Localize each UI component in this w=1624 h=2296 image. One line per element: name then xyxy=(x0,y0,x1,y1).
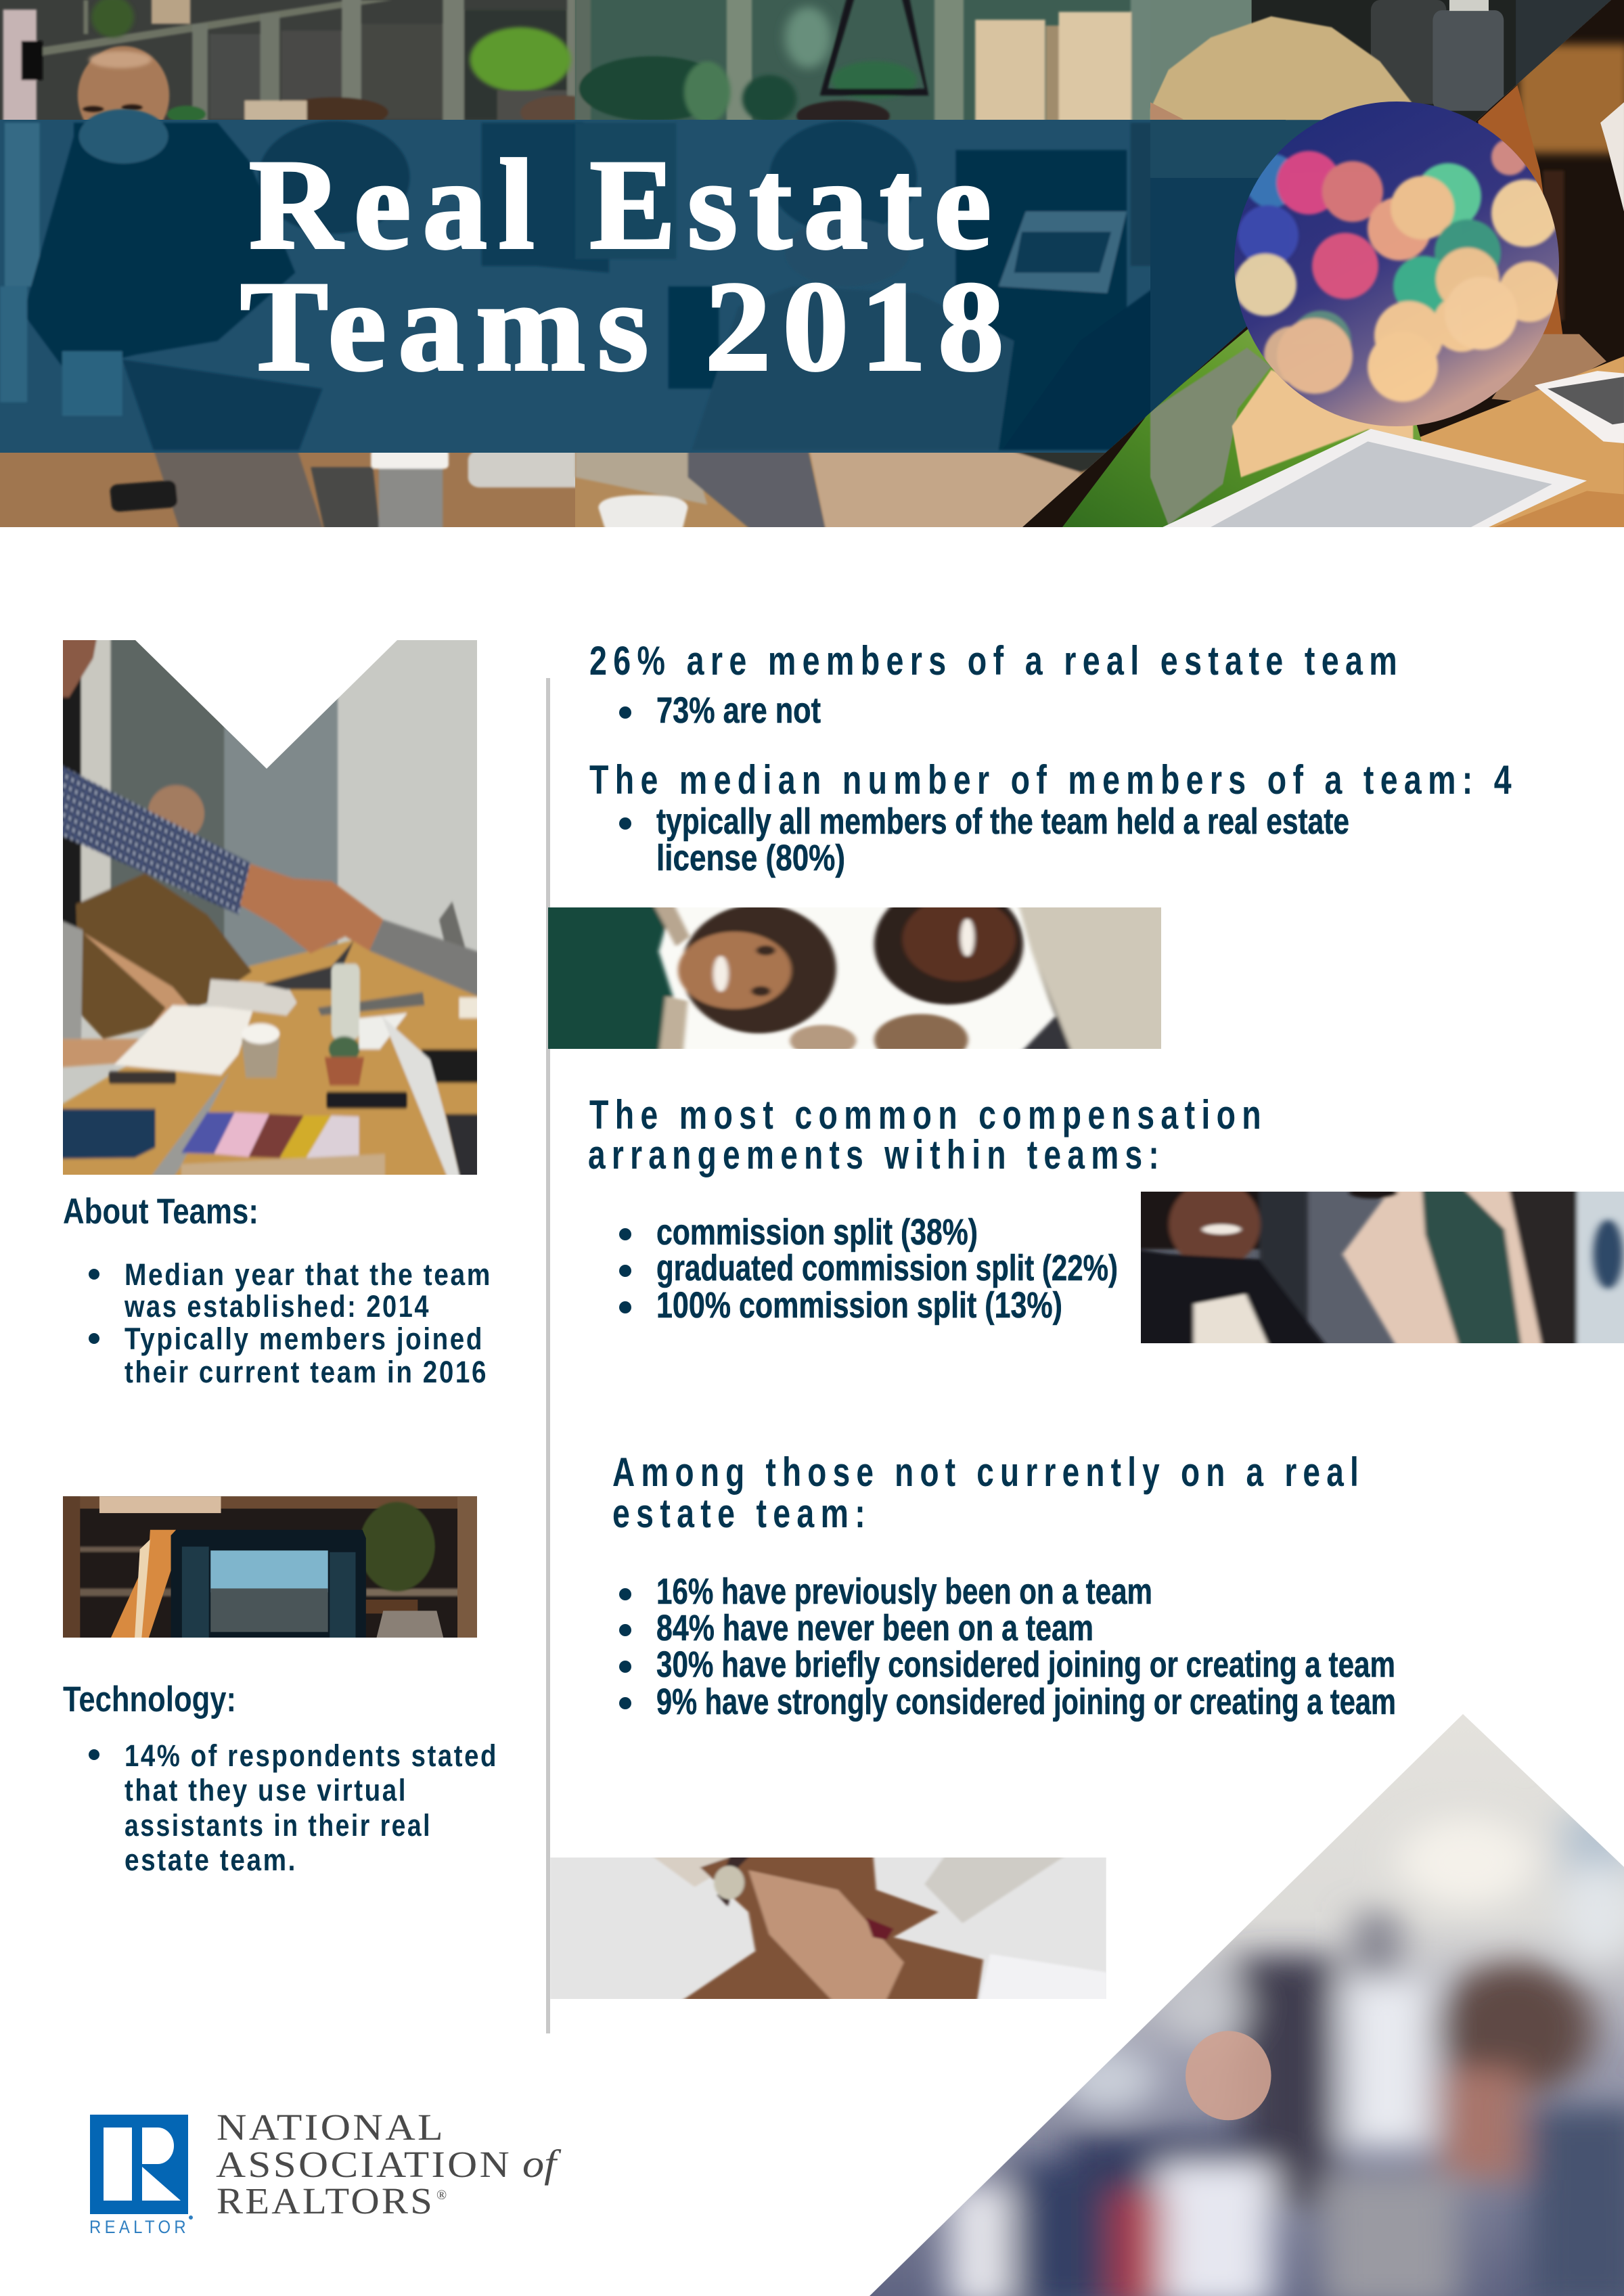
bullet list: compensation arrangements xyxy=(619,1212,1118,1326)
logo mark: blue R block xyxy=(89,2115,193,2237)
statement: compensation heading: arrangements within teams: xyxy=(588,1132,1165,1177)
bullet list: about teams xyxy=(89,1257,492,1389)
vertical divider xyxy=(546,678,550,2033)
statement: not currently on a team xyxy=(612,1449,1365,1536)
banner: photo tones, right xyxy=(1150,120,1322,412)
shelves and wall, centre xyxy=(574,0,1150,120)
heading: About Teams: About Teams: xyxy=(63,1192,258,1232)
photo: stacked hands xyxy=(550,1851,1114,2007)
bullet list: not on a team: 9% have strongly considered joining or creating a team xyxy=(656,1682,1396,1722)
statement: team membership: 73% are not xyxy=(656,690,821,731)
title xyxy=(240,134,1016,398)
shelves and wall, left xyxy=(0,0,575,120)
photo: handshake over meeting table xyxy=(59,630,483,1189)
header photo: team at a table xyxy=(0,0,1624,539)
logo mark: blue R block: REALTOR xyxy=(89,2217,189,2237)
bullet list: technology: 14% of respondents stated xyxy=(125,1738,498,1773)
bullet list: compensation arrangements: 100% commission split (13%) xyxy=(656,1285,1062,1326)
bullet list: not on a team: 84% have never been on a team xyxy=(656,1608,1093,1648)
statement: compensation heading: The most common compensation xyxy=(589,1092,1267,1138)
jars and blond hair xyxy=(1150,0,1624,122)
banner: photo tones, left xyxy=(0,109,609,450)
heading: Technology: Technology: xyxy=(63,1680,236,1719)
bullet list: about teams: Typically members joined xyxy=(125,1322,484,1356)
photo: laptop with lamp and plant xyxy=(63,1496,477,1639)
table below banner, left xyxy=(0,453,575,527)
bullet list: about teams: Median year that the team xyxy=(125,1257,492,1292)
bullet list: not on a team xyxy=(619,1571,1396,1722)
bullet list: technology: assistants in their real xyxy=(125,1808,432,1843)
bullet list: about teams: was established: 2014 xyxy=(124,1289,430,1324)
logo wordmark: of xyxy=(522,2142,562,2186)
logo wordmark: ® xyxy=(436,2188,447,2203)
statement: compensation heading xyxy=(588,1092,1267,1177)
bullet list: technology: estate team. xyxy=(125,1843,297,1877)
statement: median team size xyxy=(589,757,1518,878)
bullet list: compensation arrangements: commission split (38%) xyxy=(656,1212,978,1253)
bullet list: not on a team: 16% have previously been on a team xyxy=(656,1571,1152,1612)
statement: median team size: license (80%) xyxy=(656,838,845,878)
bullet list: not on a team: 30% have briefly considered joining or creating a team xyxy=(656,1644,1395,1685)
bullet list: technology xyxy=(89,1738,498,1877)
header photo: woman with tablet and phone xyxy=(999,0,1624,539)
blurred photo triangle xyxy=(870,1714,1624,2296)
bullet list: technology: that they use virtual xyxy=(125,1773,407,1807)
statement: median team size: typically all members of the team held a real estate xyxy=(656,801,1349,842)
bullet list: about teams: their current team in 2016 xyxy=(125,1355,488,1389)
bokeh circle xyxy=(1234,102,1560,426)
title: Teams 2018 xyxy=(240,256,1016,398)
statement: not currently on a team: Among those not currently on a real xyxy=(612,1449,1365,1495)
statement: not currently on a team: estate team: xyxy=(612,1491,872,1536)
logo wordmark xyxy=(216,2107,562,2222)
logo wordmark: REALTORS xyxy=(217,2180,434,2222)
banner: photo tones, centre xyxy=(575,121,1184,450)
title: Real Estate xyxy=(249,134,1003,276)
statement: team membership xyxy=(589,638,1403,731)
bullet list: compensation arrangements: graduated commission split (22%) xyxy=(656,1248,1118,1288)
banner overlay with title backing xyxy=(0,109,1344,453)
table below banner, centre xyxy=(574,443,1116,527)
logo wordmark: NATIONAL xyxy=(217,2107,445,2148)
photo: two women smiling xyxy=(1135,1181,1624,1349)
photo: group looking down at camera xyxy=(541,884,1170,1066)
statement: team membership: 26% are members of a real estate team xyxy=(589,638,1403,683)
logo wordmark: ASSOCIATION xyxy=(216,2144,512,2185)
logo: National Association of Realtors xyxy=(89,2107,562,2237)
